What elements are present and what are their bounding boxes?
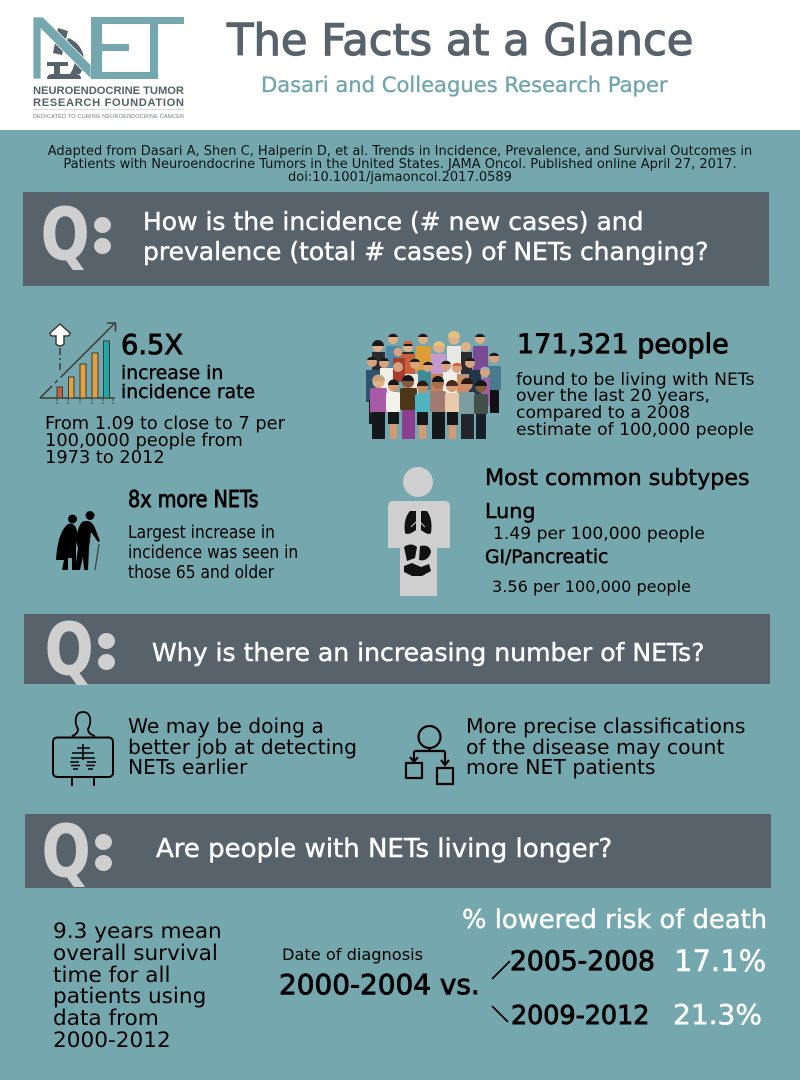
stat detail: From 1.09 to close to 7 per — [45, 412, 285, 434]
header band — [0, 0, 800, 130]
survival statement — [53, 919, 222, 1053]
Q mark: Q — [42, 810, 90, 893]
icon: crowd of people — [366, 331, 501, 439]
survival statement: 9.3 years mean — [53, 919, 222, 944]
question text: Why is there an increasing number of NETs? — [152, 638, 705, 667]
logo: RESEARCH FOUNDATION — [33, 97, 184, 109]
citation: Patients with Neuroendocrine Tumors in the United States. JAMA Oncol. Published online April 27, 2017. — [63, 157, 737, 172]
text: classifications — [466, 714, 746, 779]
survival statement: time for all — [53, 963, 170, 988]
text: classifications: more NET patients — [466, 755, 656, 779]
Q mark: Q — [41, 193, 89, 276]
stat label: incidence rate — [121, 382, 255, 403]
text: classifications: of the disease may count — [466, 734, 724, 758]
period 2005-2008: 2005-2008 — [510, 946, 655, 977]
subtype: GI/pancreatic: GI/Pancreatic — [485, 547, 608, 568]
text: better detection: better job at detecting — [128, 734, 357, 758]
citation: doi:10.1001/jamaoncol.2017.0589 — [288, 170, 512, 185]
text: better detection: We may be doing a — [128, 714, 324, 738]
text: better detection: NETs earlier — [128, 755, 247, 779]
question banner 3 — [25, 814, 771, 888]
heading: most common subtypes: Most common subtypes — [485, 465, 750, 491]
stat label — [121, 363, 255, 403]
lung rate: 1.49 per 100,000 people — [493, 524, 705, 544]
logo: NEUROENDOCRINE TUMOR — [33, 85, 184, 97]
icon: classification flow — [404, 724, 454, 786]
subtitle: Dasari and Colleagues Research Paper — [261, 72, 668, 97]
stat: 171,321 people: 171,321 people — [517, 329, 729, 360]
stat detail: 1973 to 2012 — [45, 447, 165, 468]
question text: prevalence (total # cases) of NETs changing? — [143, 237, 708, 266]
citation: Adapted from Dasari A, Shen C, Halperin D, et al. Trends in Incidence, Prevalence, and Survival Outcomes in — [48, 144, 752, 159]
text: classifications: More precise classifications — [466, 714, 746, 738]
stat detail — [516, 370, 754, 440]
value 17.1%: 17.1% — [674, 944, 766, 978]
question banner 2 — [24, 614, 770, 684]
question text — [143, 207, 708, 266]
subtype: lung: Lung — [485, 499, 536, 523]
survival statement: 2000-2012 — [53, 1028, 171, 1053]
icon: body with lungs and GI organs — [388, 467, 450, 596]
survival statement: overall survival — [53, 941, 218, 966]
date of diagnosis label: Date of diagnosis — [282, 945, 423, 964]
stat label: increase in — [121, 363, 223, 384]
stat: 6.5X: 6.5X — [121, 330, 183, 361]
question text: Are people with NETs living longer? — [156, 834, 612, 864]
comparison baseline: 2000-2004 vs. — [279, 968, 480, 1001]
icon: x-ray — [52, 711, 114, 786]
stat detail: over the last 20 years, — [516, 386, 710, 406]
question text: How is the incidence (# new cases) and — [143, 207, 644, 236]
icon: elderly couple — [56, 511, 100, 570]
value 21.3%: 21.3% — [673, 998, 762, 1031]
lowered risk heading: % lowered risk of death — [462, 905, 767, 935]
stat detail: compared to a 2008 — [516, 403, 690, 423]
question banner 1 — [23, 192, 769, 286]
survival statement: patients using — [53, 984, 206, 1009]
logo: DEDICATED TO CURING NEUROENDOCRINE CANCER — [33, 114, 184, 120]
text: largest increase: those 65 and older — [128, 563, 274, 583]
citation — [48, 144, 752, 185]
icon: rising bar chart — [40, 322, 116, 404]
Q mark: Q — [45, 608, 93, 691]
survival statement: data from — [53, 1006, 159, 1031]
comparison arrows — [491, 960, 511, 1023]
text: largest increase — [128, 523, 298, 583]
stat detail: estimate of 100,000 people — [516, 420, 754, 440]
GI rate: 3.56 per 100,000 people — [492, 577, 691, 596]
text: better detection — [128, 714, 357, 779]
title: The Facts at a Glance — [227, 16, 693, 66]
stat detail — [45, 412, 285, 468]
text: largest increase: Largest increase in — [128, 523, 275, 543]
period 2009-2012: 2009-2012 — [511, 1000, 649, 1030]
text: largest increase: incidence was seen in — [128, 543, 298, 563]
heading: 8x more NETs: 8x more NETs — [128, 487, 259, 513]
stat detail: found to be living with NETs — [516, 370, 754, 390]
stat detail: 100,0000 people from — [45, 430, 243, 451]
logo — [33, 17, 184, 120]
